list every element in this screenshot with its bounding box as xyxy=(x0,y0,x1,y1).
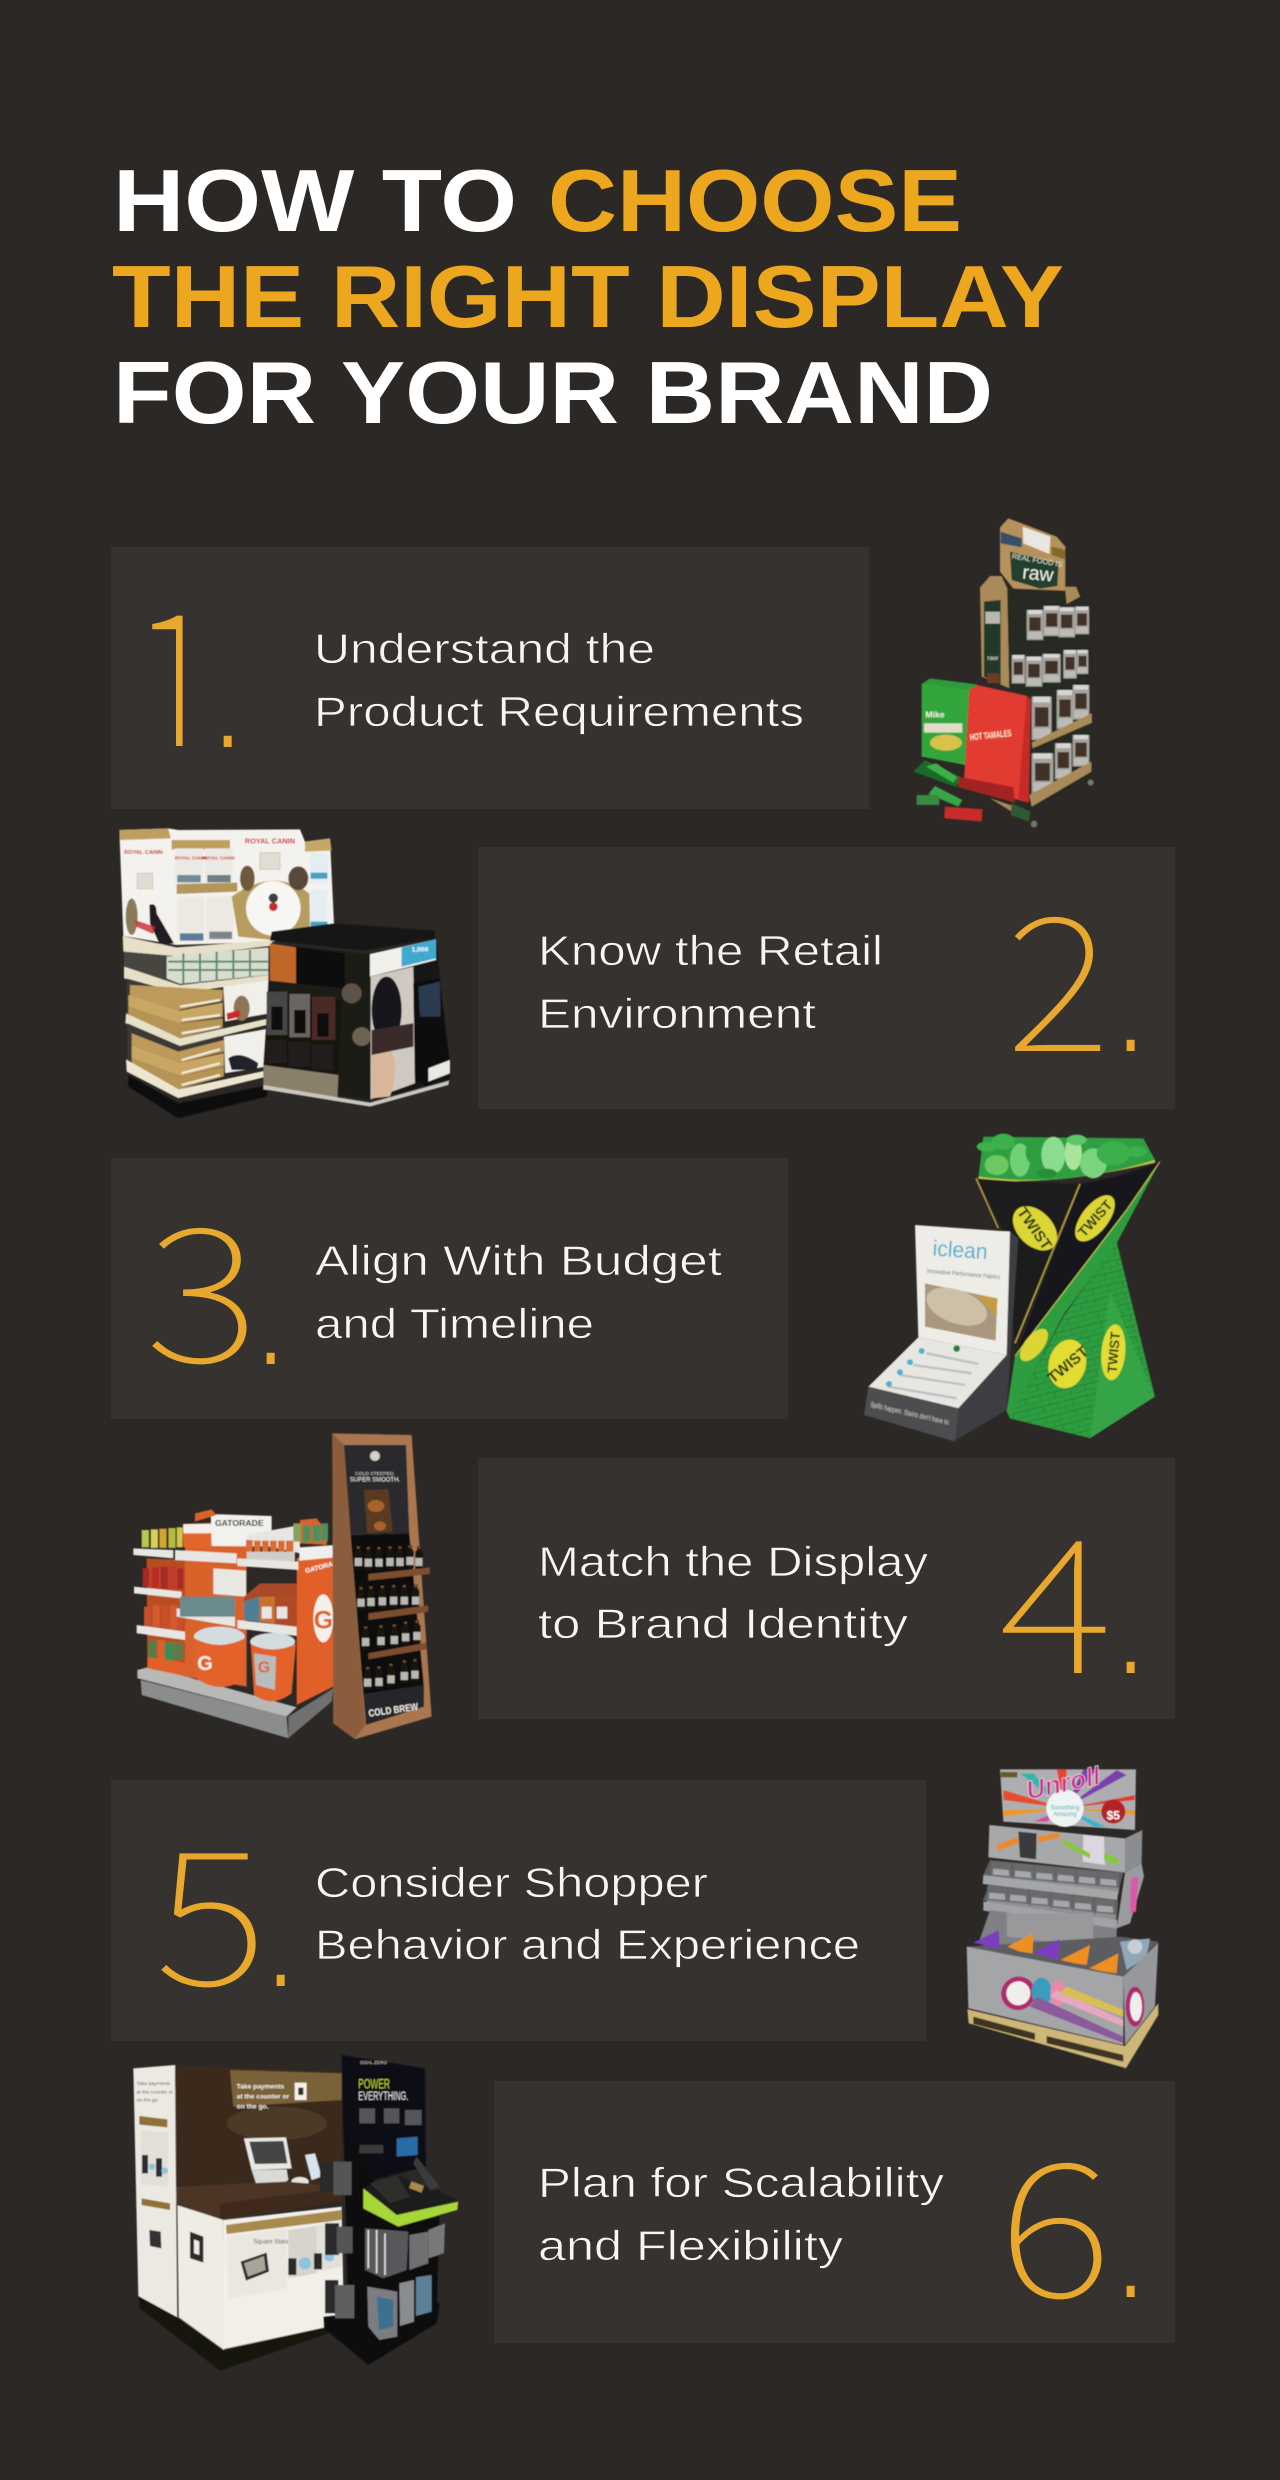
gatorade endcap: GATORADE xyxy=(215,1518,264,1528)
step text xyxy=(314,625,804,735)
step text: Consider Shopper xyxy=(315,1859,708,1906)
side tower xyxy=(980,576,1009,688)
title line 2: THE RIGHT DISPLAY xyxy=(112,247,1064,346)
iclean display xyxy=(864,1225,1018,1442)
hair care display xyxy=(263,923,450,1107)
lower tray xyxy=(967,1930,1158,2045)
step text xyxy=(538,1538,928,1647)
number 3: 3 xyxy=(145,1145,259,1416)
power display: EVERYTHING. xyxy=(358,2089,408,2103)
gatorade endcap: G xyxy=(258,1660,270,1677)
step text: Product Requirements xyxy=(314,688,804,735)
green twist display: TWIST xyxy=(1074,1196,1116,1240)
panel background xyxy=(111,1780,926,2041)
number 4: 4 xyxy=(999,1456,1113,1727)
base xyxy=(990,780,1094,827)
payment display: on the go. xyxy=(237,2103,269,2110)
step text: and Flexibility xyxy=(538,2222,843,2269)
shelving body xyxy=(1007,587,1093,808)
cold brew stand: COLD STEEPED. xyxy=(355,1471,395,1477)
step text: Environment xyxy=(538,990,816,1037)
image: gatorade and cold brew displays xyxy=(133,1433,432,1739)
step text xyxy=(538,927,883,1037)
step text: Understand the xyxy=(314,625,655,672)
gatorade endcap xyxy=(133,1509,343,1738)
title line 1: HOW TO xyxy=(113,151,517,250)
number 1: . xyxy=(216,653,239,770)
payment display: Take payments xyxy=(237,2083,285,2090)
pet food gondola: ROYAL CANIN xyxy=(203,855,235,860)
iclean display: Spills happen. Stains don't have to. xyxy=(870,1400,951,1427)
candy box xyxy=(913,678,1031,822)
gatorade endcap: GATORADE xyxy=(305,1558,343,1575)
header card: $5 xyxy=(1107,1808,1120,1822)
payment display: at the counter or xyxy=(137,2089,173,2095)
step text: to Brand Identity xyxy=(538,1600,908,1647)
green twist display: TWIST xyxy=(1105,1331,1123,1374)
header card xyxy=(1000,1760,1136,1830)
hair care display: 1,000 xyxy=(412,947,429,954)
step text: Align With Budget xyxy=(315,1237,722,1284)
panel background xyxy=(478,847,1175,1109)
cold brew stand: SUPER SMOOTH. xyxy=(350,1477,400,1483)
cold brew stand: COLD BREW xyxy=(368,1702,419,1720)
green twist display: TWIST xyxy=(1045,1343,1092,1387)
green twist display: TWIST xyxy=(1013,1205,1055,1254)
panel 6: plan for scalability and flexibility xyxy=(494,2080,1175,2351)
pet food gondola xyxy=(119,828,334,1118)
panel background xyxy=(494,2081,1175,2343)
power display: GOAL ZERO xyxy=(360,2060,387,2065)
panel background xyxy=(111,1158,788,1419)
step text xyxy=(315,1237,722,1347)
step text: Plan for Scalability xyxy=(538,2159,944,2206)
payment display: on the go. xyxy=(137,2098,159,2104)
header sign: REAL FOOD IS xyxy=(1011,551,1063,569)
step text xyxy=(315,1859,860,1968)
panel 2: know the retail environment xyxy=(478,834,1175,1109)
panel 3: align with budget and timeline xyxy=(111,1145,788,1419)
payment display xyxy=(133,2065,344,2371)
payment display: Take payments xyxy=(137,2081,171,2087)
title line 1 xyxy=(113,151,962,250)
iclean display: iclean xyxy=(932,1235,988,1264)
power display: POWER xyxy=(358,2075,390,2091)
number 2: . xyxy=(1119,957,1142,1074)
pet food gondola: ROYAL CANIN xyxy=(124,850,163,856)
pallet xyxy=(967,2003,1158,2068)
side tower: raw xyxy=(987,655,998,662)
header card: Amazing xyxy=(1053,1812,1077,1818)
pet food gondola: ROYAL CANIN xyxy=(175,855,207,860)
header card: Something xyxy=(1051,1805,1079,1811)
panel 1: understand the product requirements xyxy=(111,525,869,814)
payment display: Square Stand xyxy=(253,2239,290,2245)
payment display: at the counter or xyxy=(237,2093,290,2100)
title line 1: CHOOSE xyxy=(548,151,962,250)
panel background xyxy=(111,547,869,809)
gatorade endcap: G xyxy=(314,1607,333,1634)
title xyxy=(112,151,1064,442)
candy box: HOT TAMALES xyxy=(969,728,1012,742)
image: pet food and hair care displays xyxy=(119,828,450,1118)
panel 4: match the display to brand identity xyxy=(478,1456,1175,1727)
number 4: . xyxy=(1119,1579,1142,1696)
number 6: . xyxy=(1119,2203,1142,2320)
green twist display xyxy=(976,1134,1160,1438)
step text xyxy=(538,2159,944,2269)
pet food gondola: ROYAL CANIN xyxy=(245,836,295,845)
image: twist and iclean displays xyxy=(864,1134,1160,1442)
image: tape display on pallet xyxy=(967,1760,1158,2068)
number 5: . xyxy=(269,1892,292,2009)
number 1: 1 xyxy=(127,525,224,814)
power display xyxy=(320,2055,458,2365)
panel background xyxy=(478,1458,1175,1719)
number 6: 6 xyxy=(998,2080,1112,2351)
upper tray tower xyxy=(978,1825,1144,1963)
step text: and Timeline xyxy=(315,1300,594,1347)
gatorade endcap: G xyxy=(197,1653,213,1675)
step text: Match the Display xyxy=(538,1538,928,1585)
panel 5: consider shopper behavior and experience xyxy=(111,1769,926,2041)
step text: Behavior and Experience xyxy=(315,1921,860,1968)
number 3: . xyxy=(259,1270,282,1387)
number 5: 5 xyxy=(155,1769,267,2040)
image: food and candy display xyxy=(913,518,1094,827)
iclean display: Innovative Performance Fabrics xyxy=(927,1269,1000,1281)
step text: Know the Retail xyxy=(538,927,883,974)
image: payment and power displays xyxy=(133,2055,458,2371)
header sign xyxy=(1000,518,1065,591)
header card: Unroll xyxy=(1023,1760,1104,1805)
title line 3: FOR YOUR BRAND xyxy=(113,343,993,442)
candy box: Mike xyxy=(925,709,945,719)
number 2: 2 xyxy=(1006,834,1110,1105)
header sign: raw xyxy=(1021,562,1055,587)
cold brew stand xyxy=(332,1433,432,1739)
